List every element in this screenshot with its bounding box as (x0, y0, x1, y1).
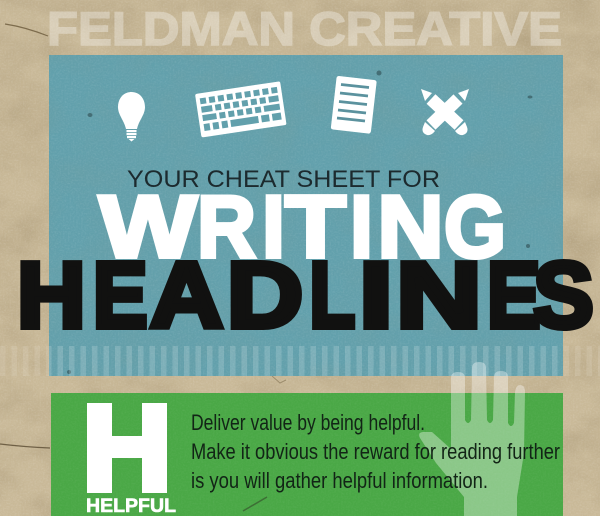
icon: light bulb (118, 92, 145, 142)
body text (191, 410, 560, 493)
title: Headlines: L (310, 243, 355, 347)
icon: keyboard (195, 81, 287, 138)
title: Writing: W (99, 177, 197, 276)
stripe band: teal (49, 346, 563, 376)
title: Headlines: D (227, 243, 303, 347)
title: Writing: R (197, 177, 256, 276)
panel: helpful (51, 393, 563, 516)
icon: crossed pencils (421, 89, 469, 135)
title: Headlines: S (533, 243, 594, 347)
stripe band: left paper (0, 346, 49, 376)
title: Writing: T (285, 177, 346, 276)
title: Headlines: I (359, 243, 393, 347)
title: Headlines: N (396, 243, 482, 347)
panel: teal header (49, 55, 563, 376)
title: Writing: G (444, 177, 506, 276)
title: Writing: I (350, 177, 373, 276)
body text: Deliver value by being helpful. (191, 410, 425, 435)
title: Headlines: H (17, 243, 86, 347)
title: Writing: N (377, 177, 444, 276)
icon: hand (419, 362, 525, 516)
title: Headlines: E (487, 243, 540, 347)
body text: is you will gather helpful information. (191, 468, 488, 493)
title: Headlines: E (93, 243, 148, 347)
title: Headlines: A (150, 243, 223, 347)
letter H (87, 403, 167, 493)
watermark: Feldman Creative: FELDMAN CREATIVE (47, 2, 562, 55)
stripe band: right paper (563, 346, 600, 376)
title: Writing: I (262, 177, 285, 276)
subtitle: YOUR CHEAT SHEET FOR (127, 166, 440, 193)
icon: document (331, 76, 377, 134)
